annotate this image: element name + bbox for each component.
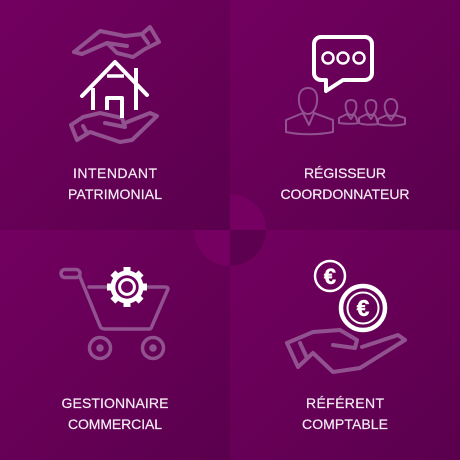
title: gestionnaire commercial: GESTIONNAIRE xyxy=(62,395,168,411)
title: intendant patrimonial: PATRIMONIAL xyxy=(68,186,162,202)
icon: lower hand xyxy=(71,113,157,142)
panel: bottom left background xyxy=(0,230,230,460)
icon: cart with gear xyxy=(61,267,168,358)
panel: top left background xyxy=(0,0,230,230)
title: referent comptable: RÉFÉRENT xyxy=(306,395,384,411)
title: referent comptable: COMPTABLE xyxy=(302,416,388,432)
icon: house xyxy=(82,62,147,118)
icon: speech bubble xyxy=(314,37,372,91)
icon: people xyxy=(286,88,405,134)
icon: house protected by hands xyxy=(71,27,159,142)
icon: open hand xyxy=(287,330,405,372)
icon: small euro coin: € xyxy=(324,264,336,289)
icon: gear xyxy=(107,267,147,307)
title: regisseur coordonnateur xyxy=(280,165,410,202)
icon: upper hand xyxy=(74,27,159,57)
title: intendant patrimonial: INTENDANT xyxy=(73,165,157,181)
title: gestionnaire commercial: COMMERCIAL xyxy=(68,416,162,432)
panel: bottom right background xyxy=(230,230,460,460)
title: referent comptable xyxy=(302,395,388,432)
icon: speech bubble and people xyxy=(286,37,405,134)
central circle quadrants xyxy=(194,194,266,266)
panel: top right background xyxy=(230,0,460,230)
title: regisseur coordonnateur: RÉGISSEUR xyxy=(304,165,386,181)
icon: large euro coin: € xyxy=(357,295,370,321)
title: regisseur coordonnateur: COORDONNATEUR xyxy=(280,186,410,202)
icon: cart xyxy=(61,270,168,358)
title: gestionnaire commercial xyxy=(62,395,168,432)
title: intendant patrimonial xyxy=(68,165,162,202)
icon: hand with euro coins xyxy=(287,261,405,372)
